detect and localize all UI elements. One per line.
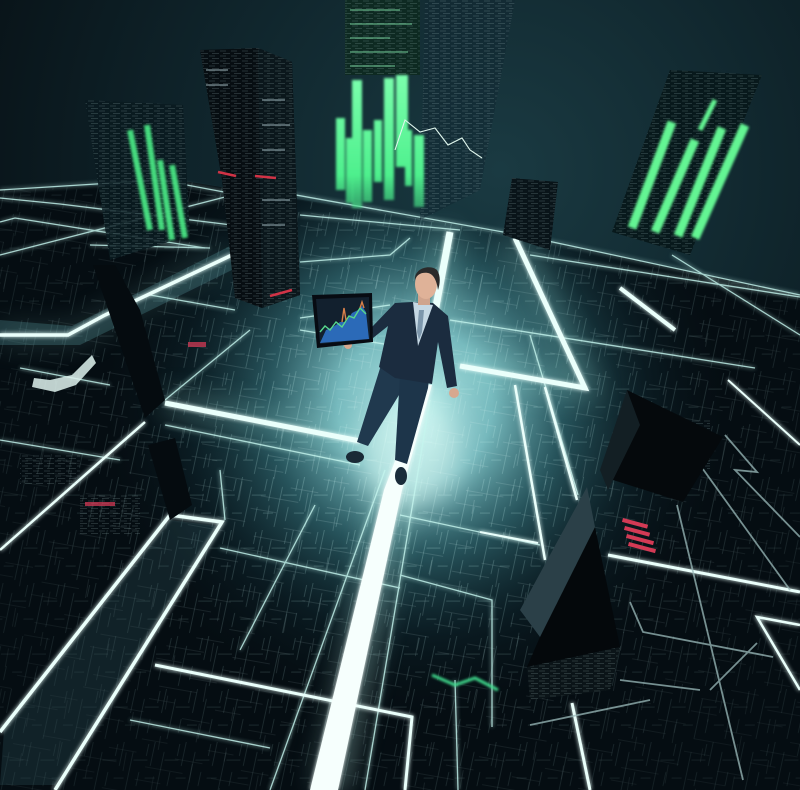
- tower: tall dark left: [200, 48, 300, 308]
- city floor: [0, 182, 800, 790]
- tower: small mid right: [503, 178, 558, 250]
- shirt and tie: [413, 302, 433, 346]
- green floor trace: [432, 675, 498, 690]
- dark block: lower left: [148, 438, 192, 520]
- face: [415, 269, 437, 299]
- red data marks: [85, 342, 656, 553]
- central light beam: [310, 385, 432, 790]
- tie: [417, 310, 424, 340]
- person: [344, 267, 459, 485]
- wide floor glow behind the central beam: [0, 232, 585, 790]
- floor data block: lower left: [20, 420, 710, 680]
- hair: [415, 267, 440, 290]
- left shoe: [346, 451, 364, 463]
- translucent floor panel: lower left: [0, 520, 216, 785]
- right shoe: [395, 467, 407, 485]
- tablet with chart: [312, 293, 373, 348]
- tablet chart: blue area: [320, 306, 369, 343]
- dark block: right cube: [600, 390, 723, 502]
- hologram line chart: [395, 120, 482, 158]
- translucent band along the upper left path: [0, 245, 236, 345]
- left hand: [344, 341, 352, 349]
- dark block: left foreground: [93, 265, 165, 418]
- left leg: [357, 362, 410, 446]
- thin glowing grid lines: [0, 180, 800, 790]
- green bar chart hologram: [336, 75, 424, 208]
- neck: [418, 293, 430, 305]
- white floor data glyph: [32, 355, 96, 392]
- tower: right green: [612, 70, 762, 255]
- dim lines on the dark right side: [530, 435, 800, 780]
- tablet chart: orange peak: [342, 302, 364, 322]
- tablet chart: green line: [320, 308, 366, 332]
- tower: green left: [85, 100, 190, 260]
- dark block: lower right monolith: [520, 487, 620, 700]
- tower: faint column behind chart: [420, 0, 515, 220]
- tower: top code column: [345, 0, 420, 75]
- right leg: [395, 370, 430, 464]
- jacket: [372, 302, 457, 388]
- right hand: [449, 388, 459, 398]
- bright glowing paths: [0, 232, 800, 790]
